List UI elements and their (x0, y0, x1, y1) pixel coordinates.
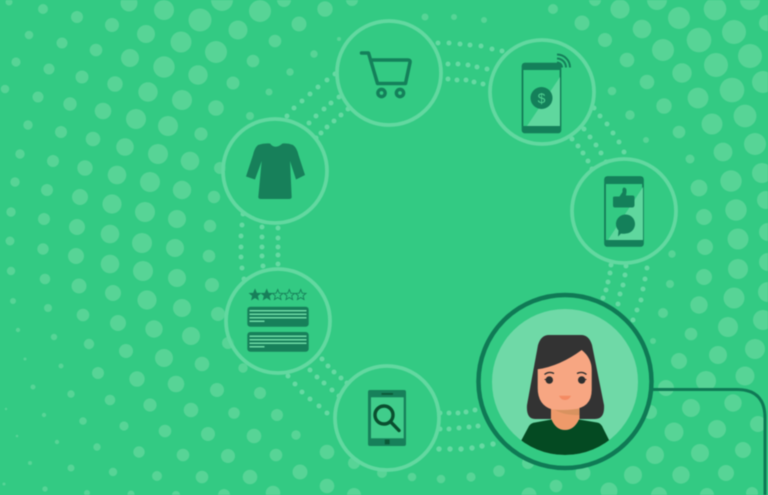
hair (527, 335, 604, 419)
mouth (559, 396, 571, 400)
avatar: customer portrait (478, 295, 652, 468)
node: social likes and comments (572, 159, 676, 263)
icon: tablet with magnifier (368, 390, 406, 446)
node: star reviews (226, 269, 330, 373)
node: shopping cart (337, 21, 441, 125)
dotted connector paths (238, 40, 650, 452)
face (538, 350, 592, 410)
node: clothing item (223, 119, 327, 223)
node: mobile payment (490, 40, 594, 144)
connector line from avatar (652, 390, 765, 495)
node: product search (335, 366, 439, 470)
icon: cart (362, 53, 410, 97)
icon: shirt (246, 143, 305, 199)
icon: review cards (247, 307, 309, 352)
sweater (521, 420, 610, 460)
eyes (544, 372, 586, 384)
icon: phone with thumb and chat bubble (604, 177, 644, 246)
icon: phone with dollar and wifi: $ (538, 90, 546, 106)
neck (550, 408, 580, 431)
icon: star rating row (250, 290, 306, 300)
